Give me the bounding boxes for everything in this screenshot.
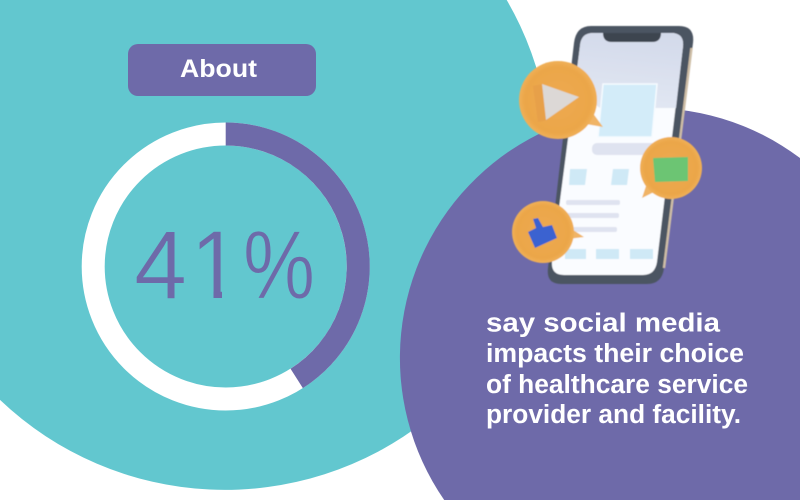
- screen image block: [598, 84, 657, 137]
- statement text: of healthcare service: [486, 371, 748, 399]
- donut chart: 41 percent: [93, 134, 358, 399]
- screen pill: [592, 143, 677, 155]
- phone notch: [603, 33, 661, 42]
- thumbs-up: [528, 218, 557, 248]
- illustration: smartphone with social media bubbles: [512, 26, 702, 284]
- statement text: provider and facility.: [486, 401, 741, 429]
- label: About: [128, 44, 316, 96]
- value: 41%: [136, 231, 312, 298]
- screen text lines: [562, 200, 620, 232]
- envelope: [653, 157, 688, 182]
- bubble: play: [519, 61, 603, 139]
- phone screen: [552, 33, 683, 275]
- phone gold edge: [664, 48, 692, 268]
- value: 41%: 4: [134, 210, 187, 320]
- screen top shading: [575, 33, 683, 108]
- phone body: [548, 26, 693, 284]
- play shadow: [533, 84, 548, 122]
- background circle: teal: [0, 0, 551, 490]
- bubble: like: [512, 201, 584, 263]
- statement text: [486, 310, 748, 429]
- statement text: impacts their choice: [486, 340, 744, 368]
- statement text: say social media: [486, 310, 721, 338]
- play triangle: [542, 84, 579, 120]
- screen bottom tabs: [565, 249, 653, 259]
- bubble: email: [640, 137, 702, 199]
- value: 41%: 1: [190, 210, 240, 320]
- value: 41%: %: [243, 210, 315, 320]
- label: About: About: [180, 55, 258, 83]
- screen squares: [569, 169, 629, 185]
- background circle: purple: [400, 108, 800, 500]
